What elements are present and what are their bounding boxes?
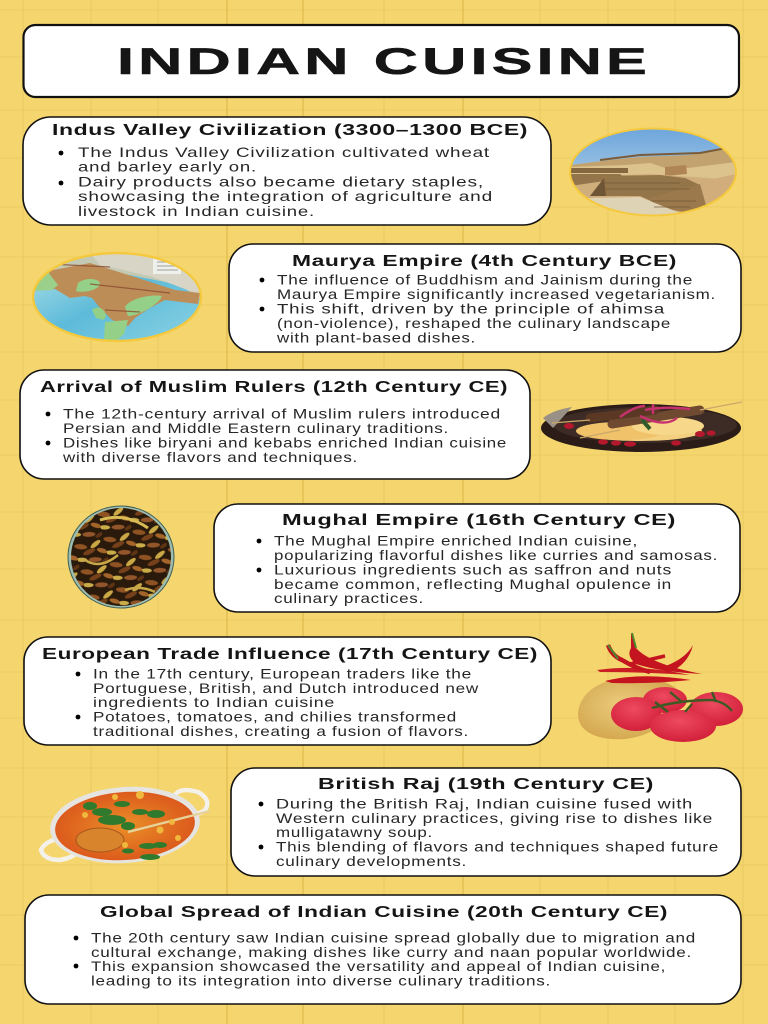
image: kebab plate — [541, 402, 742, 452]
title: INDIAN CUISINE — [117, 41, 651, 82]
text block: European Trade: traditional dishes, creating a fusion of flavors. — [93, 723, 469, 739]
text block: Maurya — [260, 272, 716, 346]
text block: Muslim Rulers: with diverse flavors and techniques. — [62, 449, 358, 465]
text block: British Raj: mulligatawny soup. — [276, 824, 433, 840]
text block: Maurya: This shift, driven by the principle of ahimsa — [277, 300, 665, 316]
image: dish of nuts — [68, 506, 174, 608]
panel: European Trade Influence — [24, 637, 551, 745]
text block: Mughal: Luxurious ingredients such as saffron and nuts — [274, 562, 672, 578]
text block: Indus Valley: The Indus Valley Civilization cultivated wheat — [78, 144, 490, 160]
text block: Global Spread: The 20th century saw Indian cuisine spread globally due to migration and — [91, 930, 696, 946]
heading: European Trade: European Trade Influence (17th Century CE) — [42, 646, 538, 663]
text block: Maurya: The influence of Buddhism and Jainism during the — [277, 272, 693, 288]
text block: Muslim Rulers: Persian and Middle Eastern culinary traditions. — [63, 420, 449, 436]
panel: Global Spread of Indian Cuisine — [25, 895, 741, 1004]
text block: Maurya: (non-violence), reshaped the culinary landscape — [277, 315, 671, 331]
panel: Arrival of Muslim Rulers — [20, 370, 530, 479]
text block: European Trade: ingredients to Indian cuisine — [93, 694, 335, 710]
heading: Mughal: Mughal Empire (16th Century CE) — [282, 512, 676, 529]
text block: European Trade: In the 17th century, European traders like the — [93, 666, 472, 682]
image: map of Maurya Empire — [33, 253, 201, 341]
heading: Indus Valley: Indus Valley Civilization (3300–1300 BCE) — [52, 122, 528, 139]
text block: Maurya: with plant-based dishes. — [276, 330, 476, 346]
text block: European Trade: Potatoes, tomatoes, and chilies transformed — [93, 708, 457, 724]
text block: British Raj: During the British Raj, Indian cuisine fused with — [276, 796, 693, 812]
text block: British Raj: culinary developments. — [276, 853, 467, 869]
text block: Mughal: popularizing flavorful dishes like curries and samosas. — [274, 547, 718, 563]
text block: Mughal: culinary practices. — [274, 590, 424, 606]
text block: European Trade — [76, 666, 479, 739]
text block: Mughal — [257, 532, 718, 606]
text block: Indus Valley — [59, 144, 493, 219]
heading: Maurya: Maurya Empire (4th Century BCE) — [292, 253, 677, 270]
text block: Indus Valley: and barley early on. — [78, 158, 257, 174]
text block: Mughal: The Mughal Empire enriched Indian cuisine, — [274, 532, 638, 548]
text block: Global Spread: This expansion showcased the versatility and appeal of Indian cuisine, — [91, 958, 666, 974]
text block: Global Spread — [74, 930, 696, 988]
text block: Maurya: Maurya Empire significantly increased vegetarianism. — [277, 286, 716, 302]
title — [24, 25, 739, 97]
panel: Maurya Empire — [229, 244, 741, 352]
text block: Muslim Rulers — [46, 406, 507, 465]
panel: Indus Valley Civilization — [23, 117, 551, 225]
text block: European Trade: Portuguese, British, and Dutch introduced new — [93, 680, 479, 696]
heading: British Raj: British Raj (19th Century CE) — [318, 776, 654, 793]
text block: Indus Valley: Dairy products also became dietary staples, — [78, 174, 484, 190]
image: potato, tomatoes and chilies — [578, 633, 743, 742]
text block: Muslim Rulers: The 12th-century arrival of Muslim rulers introduced — [63, 406, 501, 422]
text block: British Raj — [259, 796, 719, 869]
heading: Global Spread: Global Spread of Indian Cuisine (20th Century CE) — [100, 904, 668, 921]
text block: Global Spread: leading to its integration into diverse culinary traditions. — [91, 972, 551, 988]
text block: Indus Valley: showcasing the integration of agriculture and — [78, 188, 493, 204]
text block: British Raj: Western culinary practices, giving rise to dishes like — [276, 810, 713, 826]
text block: Indus Valley: livestock in Indian cuisine. — [78, 203, 315, 219]
panel: Mughal Empire — [214, 504, 740, 612]
text block: Muslim Rulers: Dishes like biryani and kebabs enriched Indian cuisine — [63, 434, 507, 450]
image: Indus ruins — [570, 128, 736, 216]
text block: Mughal: became common, reflecting Mughal opulence in — [274, 576, 672, 592]
text block: British Raj: This blending of flavors and techniques shaped future — [276, 838, 719, 854]
heading: Muslim Rulers: Arrival of Muslim Rulers (12th Century CE) — [40, 379, 508, 396]
text block: Global Spread: cultural exchange, making dishes like curry and naan popular worldwide. — [91, 944, 692, 960]
image: bowl of curry — [41, 782, 210, 868]
panel: British Raj — [231, 768, 741, 876]
